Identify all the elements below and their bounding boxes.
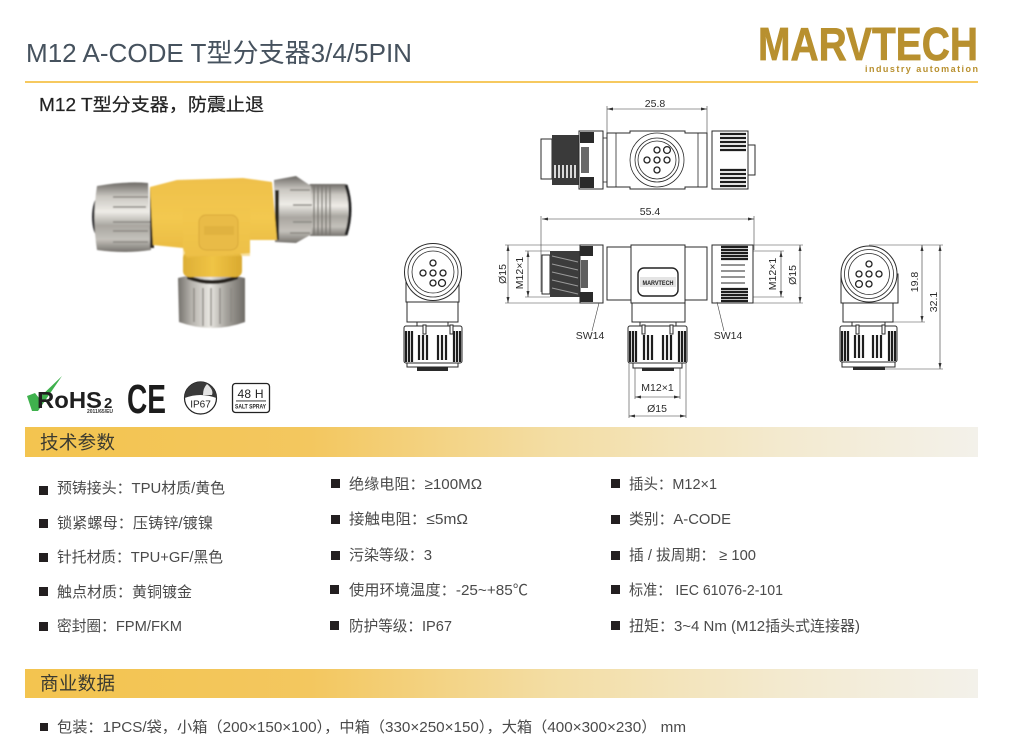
drawing: front view with dimensions: Ø15 <box>787 265 799 285</box>
drawing: front view with dimensions: Ø15 <box>497 264 509 284</box>
callout: SW14 left <box>576 303 604 342</box>
spec list: column 3 <box>611 476 860 635</box>
right metal nut and thread <box>274 176 350 243</box>
logo: MARVTECH: industry automation <box>865 64 978 74</box>
section band: 商业数据 <box>25 669 978 698</box>
left metal nut <box>92 182 154 252</box>
icon: RoHS 2: 2 <box>104 395 112 412</box>
lower metal nut <box>178 274 245 328</box>
drawing: right end view with dimensions: 19.8 <box>909 272 921 292</box>
section band: 技术参数: 技术参数 <box>40 432 115 453</box>
spec list: column 3: 插 / 拔周期： ≥ 100 <box>629 547 756 564</box>
drawing: top view with 25.8 dimension: 25.8 <box>645 98 665 110</box>
spec list: column 2: 使用环境温度：-25~+85℃ <box>349 581 528 599</box>
spec list: column 3: 插头：M12×1 <box>629 476 717 493</box>
section band: 商业数据: 商业数据 <box>40 673 115 694</box>
drawing: right end view with dimensions <box>840 245 943 370</box>
spec list: column 1: 针托材质：TPU+GF/黑色 <box>57 549 223 566</box>
spec list: column 3: 类别：A-CODE <box>629 511 731 528</box>
icon: 48 H salt spray: 48 H <box>238 387 264 401</box>
logo: MARVTECH: MARVTECH <box>758 18 978 70</box>
spec list: column 2: 防护等级：IP67 <box>349 617 452 635</box>
drawing: front view with dimensions: 55.4 <box>640 206 660 218</box>
callout: SW14 left: SW14 <box>576 330 604 342</box>
subtitle: M12 T型分支器，防震止退 <box>39 95 264 115</box>
icon: RoHS 2: RoHS <box>37 387 102 413</box>
icon: RoHS 2: 2011/65/EU <box>87 409 113 415</box>
spec list: column 2 <box>330 476 528 635</box>
spec list: column 1: 预铸接头：TPU材质/黄色 <box>57 480 225 497</box>
icon: 48 H salt spray <box>232 384 270 412</box>
icon: 48 H salt spray: SALT SPRAY <box>235 404 266 410</box>
title: M12 A-CODE T型分支器3/4/5PIN <box>26 38 412 68</box>
callout: SW14 right <box>714 302 742 342</box>
packaging data: 包装：1PCS/袋，小箱（200×150×100），中箱（330×250×150），大箱（400×300×230） mm <box>57 719 686 736</box>
yellow body <box>150 178 277 277</box>
callout: SW14 right: SW14 <box>714 330 742 342</box>
spec list: column 1 <box>39 480 225 635</box>
drawing: left end view <box>404 244 462 371</box>
product photo: yellow T connector <box>92 176 350 328</box>
drawing: front view with dimensions: Ø15 <box>647 403 667 415</box>
spec list: column 3: 扭矩：3~4 Nm (M12插头式连接器) <box>629 618 860 635</box>
icon: RoHS 2 <box>27 376 113 415</box>
drawing: front view with dimensions: M12×1 <box>767 258 779 290</box>
spec list: column 1: 触点材质：黄铜镀金 <box>57 584 192 601</box>
drawing: front view with dimensions: M12×1 <box>514 257 526 289</box>
icon: IP67: IP67 <box>190 400 211 410</box>
section band: 技术参数 <box>25 427 978 457</box>
drawing: front view with dimensions: M12×1 <box>641 382 674 394</box>
spec list: column 2: 接触电阻：≤5mΩ <box>349 511 468 528</box>
drawing: front view with dimensions <box>497 206 803 418</box>
spec list: column 3: 标准： IEC 61076-2-101 <box>629 582 783 599</box>
drawing: right end view with dimensions: 32.1 <box>928 292 940 312</box>
icon: IP67 <box>184 382 216 414</box>
spec list: column 1: 密封圈：FPM/FKM <box>57 618 182 635</box>
spec list: column 2: 污染等级：3 <box>349 546 432 564</box>
drawing: front view with dimensions: MARVTECH <box>642 280 674 287</box>
spec list: column 1: 锁紧螺母：压铸锌/镀镍 <box>57 514 213 532</box>
header rule <box>25 81 978 83</box>
drawing: top view with 25.8 dimension <box>541 98 755 189</box>
spec list: column 2: 绝缘电阻：≥100MΩ <box>349 476 482 493</box>
icon: CE mark: CE <box>127 376 166 422</box>
